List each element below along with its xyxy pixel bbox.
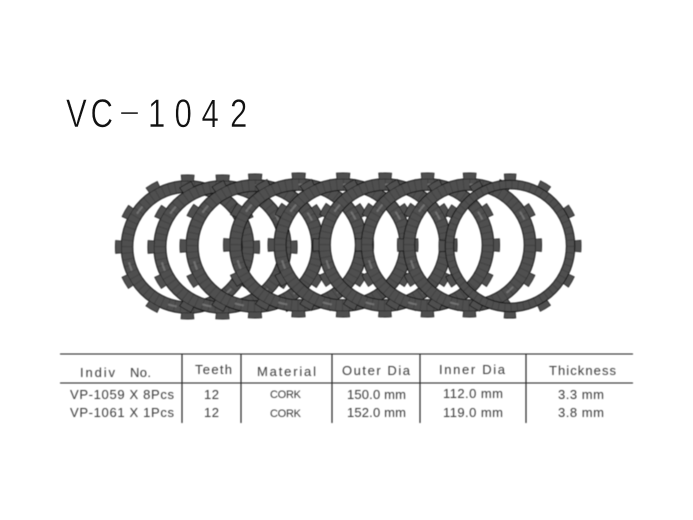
table row: VP-1059: 12 <box>204 387 219 402</box>
table row: VP-1059: 112.0 mm <box>443 386 503 401</box>
table header: Material <box>257 364 316 379</box>
table row: VP-1059 <box>70 386 604 402</box>
title: VC <box>66 91 113 136</box>
table row: VP-1059: VP-1059 X 8Pcs <box>70 387 174 402</box>
clutch plate set <box>118 176 578 316</box>
table row: VP-1061 <box>70 405 604 420</box>
table row: VP-1061: VP-1061 X 1Pcs <box>70 405 174 420</box>
table row: VP-1061: 119.0 mm <box>443 405 503 420</box>
title: - <box>118 98 141 125</box>
friction plate 1 <box>118 178 256 316</box>
table row: VP-1061: 3.8 mm <box>558 405 604 420</box>
friction plate 6 <box>316 176 454 314</box>
title <box>66 91 247 136</box>
table header: Indiv <box>80 365 116 380</box>
friction plate 2 <box>151 178 294 316</box>
friction plate 8 <box>400 176 538 314</box>
table header: Teeth <box>195 362 232 377</box>
table row: VP-1061: 152.0 mm <box>347 405 406 420</box>
table header <box>80 362 616 380</box>
table header: No. <box>130 365 151 380</box>
friction plate 7 <box>358 176 496 314</box>
friction plate 5 <box>271 176 415 314</box>
table row: VP-1059: CORK <box>270 389 302 401</box>
table rules <box>60 354 633 423</box>
friction plate 4 <box>227 176 370 314</box>
table row: VP-1061: CORK <box>270 408 302 420</box>
title: 1042 <box>148 91 247 136</box>
table header: Inner Dia <box>439 362 506 377</box>
table row: VP-1059: 3.3 mm <box>558 387 604 402</box>
table header: Outer Dia <box>342 363 411 378</box>
friction plate 3 <box>183 177 327 315</box>
friction plate 9 <box>442 177 578 315</box>
specification table <box>60 354 633 423</box>
table row: VP-1059: 150.0 mm <box>347 387 406 402</box>
table header: Thickness <box>549 363 616 378</box>
table row: VP-1061: 12 <box>204 405 219 420</box>
